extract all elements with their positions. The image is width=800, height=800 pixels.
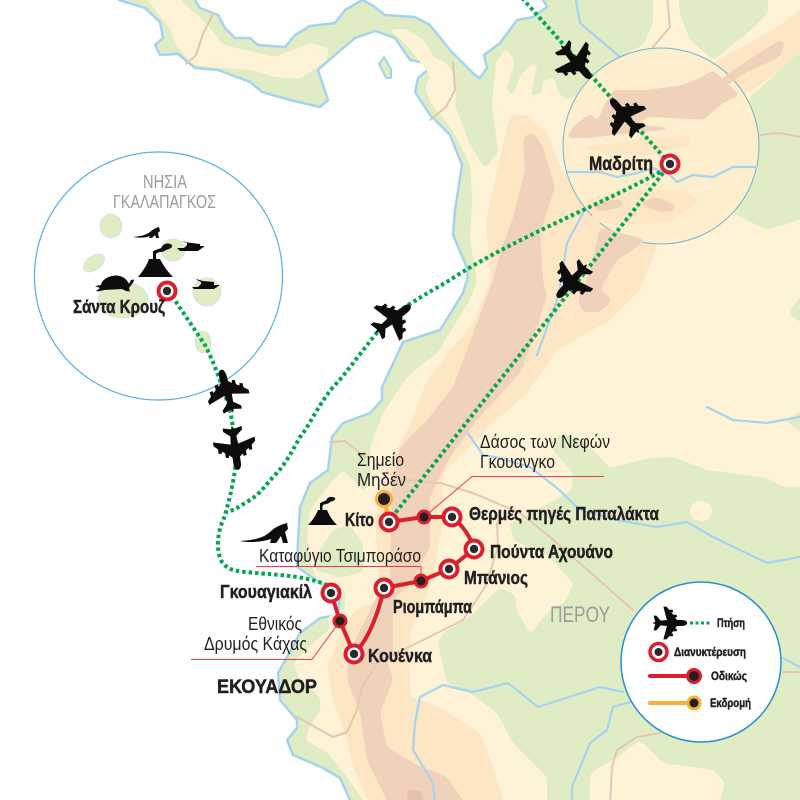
icon: volcano Cotopaxi [308,497,337,525]
islands [80,214,221,353]
terrain: peak [406,790,432,800]
legend: flight [652,607,745,639]
icon: iguana Chimborazo [240,523,288,543]
overnight stops [158,156,678,662]
label: Guango cloud forest: Δάσος των Νεφών [480,432,610,452]
label: Cajas: Εθνικός [248,614,302,634]
label: Guango cloud forest: Γκουανγκο [480,452,555,472]
road route [331,517,474,654]
roads [186,0,800,800]
label: Guango cloud forest [480,432,610,472]
small island [379,57,391,78]
icon: yacht south [192,279,220,289]
label: Mitad del Mundo: Μηδέν [357,470,406,490]
label: Mitad del Mundo: Σημείο [357,450,404,470]
place labels [73,154,659,698]
legend: overnight: Διανυκτέρευση [674,647,746,659]
label: Santa Cruz: Σάντα Κρουζ [73,297,165,318]
terrain: forest edge [788,290,800,325]
legend: excursion: Εκδρομή [710,698,751,710]
label: Chimborazo: Καταφύγιο Τσιμποράσο [259,546,421,566]
label: Ecuador: ΕΚΟΥΑΔΟΡ [217,677,317,698]
label: Galapagos: ΝΗΣΙΑ [143,172,187,192]
label: Riobamba: Ριομπάμπα [393,597,472,617]
label: Papallacta: Θερμές πηγές Παπαλάκτα [469,504,659,524]
label: Quito: Κίτο [345,510,374,530]
terrain: lowlands [293,0,800,800]
label: Guayaquil: Γκουαγιακίλ [220,582,312,602]
terrain: forest block north-east [677,0,768,60]
label: Galapagos [113,172,216,212]
legend [621,582,781,742]
legend: overnight [650,644,746,660]
label: Mitad del Mundo [357,450,406,490]
icon: yacht north [177,241,205,251]
terrain: Andes [347,132,555,800]
callout lines [191,476,604,660]
plane icons [201,31,656,473]
terrain: forest lobe near Quito [315,525,363,578]
terrain: Amazon forest [438,433,800,800]
label: Punta Ahuano: Πούντα Αχουάνο [490,542,613,562]
terrain: clearing small [690,501,712,521]
excursion: Mitad del Mundo [376,492,392,521]
inset river [567,167,757,182]
legend: excursion [650,697,751,710]
stop centres [163,160,674,658]
label: Galapagos: ΓΚΑΛΑΠΑΓΚΟΣ [113,192,216,212]
label: Banos: Μπάνιος [464,568,528,588]
label: Peru: ΠΕΡΟΥ [550,602,610,627]
label: Cuenca: Κουένκα [368,646,432,666]
road waypoints [334,511,430,627]
rivers [413,0,800,800]
terrain: foothill arm [710,0,800,100]
legend: by road [650,670,747,683]
terrain: highlands east [578,227,643,312]
icon: iguana small [133,227,160,238]
inset circle: Galapagos [34,152,282,400]
icon: volcano Galapagos [138,244,173,277]
label: Madrid: Μαδρίτη [589,154,653,175]
terrain: lowland patch north [134,0,329,79]
icon: tortoise [95,276,134,292]
legend: by road: Οδικώς [711,671,747,683]
terrain: lowland clearing [590,740,725,800]
inset circle: Madrid [563,48,759,244]
label: Cajas: Δρυμός Κάχας [204,634,307,654]
inset terrain: southern ridges [590,197,675,244]
terrain: forest east [733,35,800,230]
terrain: forest edge 2 [785,408,800,435]
terrain: foothills [327,115,657,800]
inset terrain: mountains [565,70,740,138]
inset terrain: foothills [570,135,700,225]
ridge north-east [713,40,785,90]
label: Cajas [204,614,307,654]
legend: flight: Πτήση [717,618,745,630]
flight paths [172,0,670,585]
